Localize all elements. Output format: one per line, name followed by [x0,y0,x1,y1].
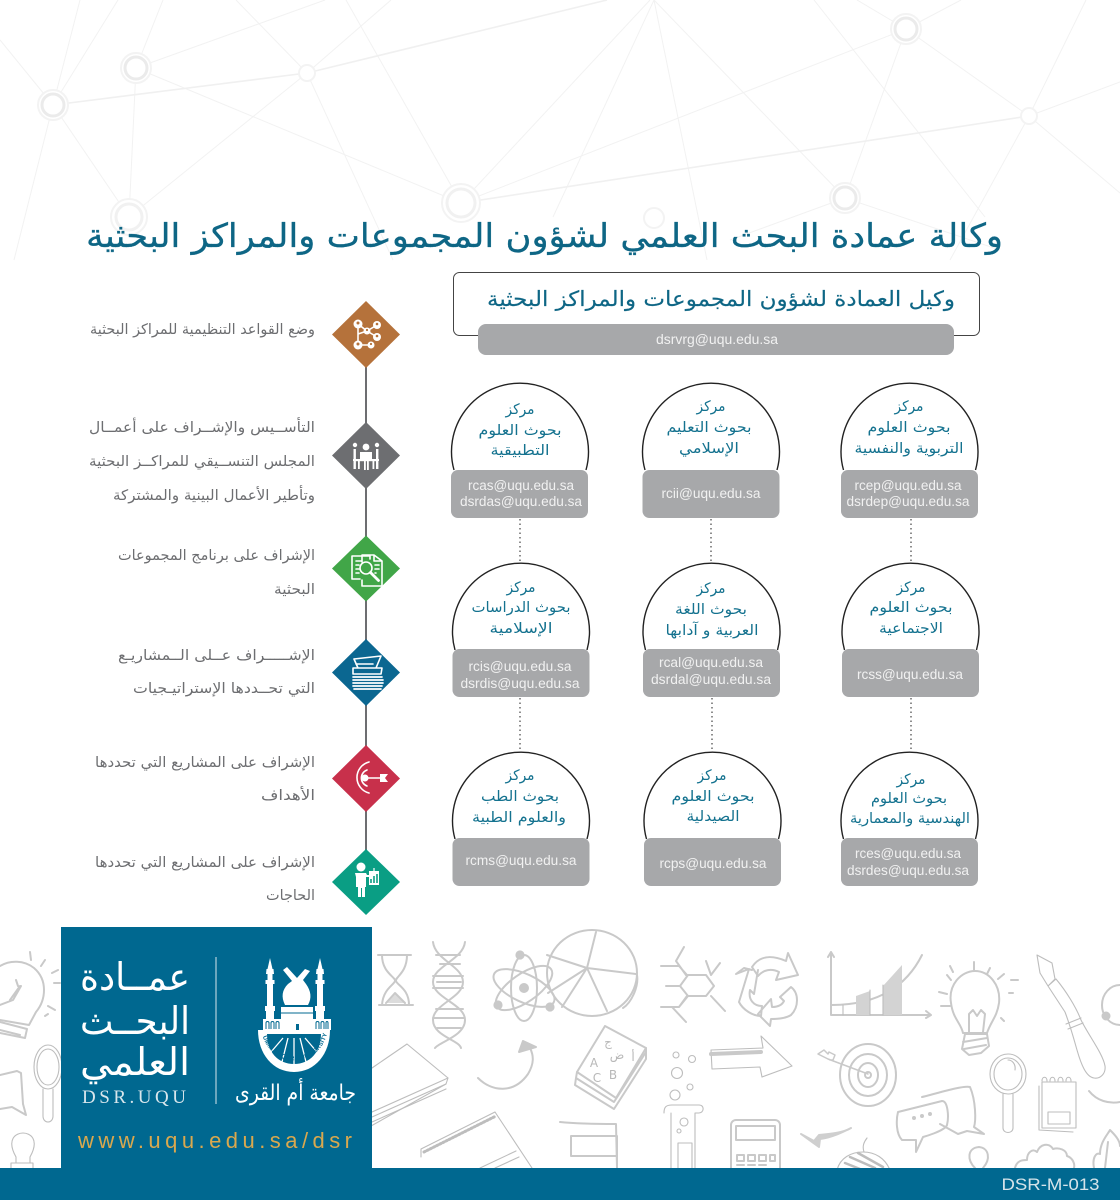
panel: centre applied sciences: التطبيقية [490,443,550,459]
icon: cloud [1015,1145,1074,1168]
icon: chat bubbles [897,1087,984,1152]
sketch icons strip [0,930,1120,1180]
text block: task 3 [118,548,315,598]
panel: centre islamic studies: مركز [506,580,536,596]
icon: left magnifier [34,1045,62,1122]
text block: task 1: وضع القواعد التنظيمية للمراكز البحثية [90,322,315,338]
panel: centre arabic language [643,563,780,697]
text block: task 2: وتأطير الأعمال البينية والمشتركة [113,485,315,504]
panel: centre arabic language: العربية و آدابها [666,621,758,639]
icon: alphabet book: ج [604,1035,612,1049]
panel: centre medical sciences: بحوث الطب [481,789,559,805]
icon: right curve [1089,1091,1120,1103]
background: network pattern [0,0,1120,260]
panel: centre pharmacy: بحوث العلوم [672,789,754,805]
text block: task 6: الإشراف على المشاريع التي تحددها [95,855,315,871]
panel: centre engineering: بحوث العلوم [871,791,947,807]
icon: left arrow [801,1128,851,1147]
icon: blue diamond layered papers [332,639,400,706]
icon: teal diamond presenter [332,849,400,915]
panel: centre educational psychology: مركز [894,399,924,415]
panel: centre islamic studies: dsrdis@uqu.edu.sa [460,676,580,691]
panel: centre applied sciences: بحوث العلوم [478,423,562,439]
panel: centre medical sciences: مركز [505,768,534,784]
icon: alphabet book: ض [610,1048,624,1063]
panel: centre islamic studies: الإسلامية [490,621,552,637]
panel: centre applied sciences [451,383,588,518]
heading: deanship name: عمــادة [80,955,190,999]
icon: notepad [1039,1077,1076,1132]
text block: task 6: الحاجات [266,888,315,904]
panel: centre educational psychology [841,383,978,518]
panel: centre educational psychology: dsrdep@uqu.edu.sa [846,494,970,509]
panel: centre medical sciences: rcms@uqu.edu.sa [466,853,577,868]
text: website url: www.uqu.edu.sa/dsr [77,1128,352,1153]
icon: stacked notebook [371,1044,448,1126]
text block: task 4 [118,648,315,697]
timeline spine [365,340,367,880]
text block: task 2: المجلس التنســيقي للمراكــز البحثية [89,454,315,470]
panel: centre islamic education: rcii@uqu.edu.sa [662,486,761,501]
text block: task 2 [89,417,315,504]
panel: vice dean box [454,272,980,355]
text block: task 5 [95,755,315,804]
heading: deanship name: البحــث [80,999,190,1043]
panel: centre applied sciences: rcas@uqu.edu.sa [468,478,574,493]
panel: centre social sciences: الاجتماعية [879,621,943,637]
text: DSR.UQU: DSR.UQU [82,1087,186,1108]
panel: centre engineering: الهندسية والمعمارية [850,811,970,827]
icon: pie chart [547,930,637,1016]
panel: vice dean box: dsrvrg@uqu.edu.sa [656,332,778,347]
panel: centre engineering: dsrdes@uqu.edu.sa [847,863,969,878]
heading: deanship name: العلمي [80,1040,190,1084]
text block: task 5: الأهداف [261,786,315,804]
icon: atom [488,951,560,1021]
icon: recycle arrows [736,953,798,1026]
icon: right edge atom [1102,985,1120,1025]
icon: fountain pen [1037,955,1105,1078]
icon: DNA helix [433,942,465,1048]
icon: green diamond document search [332,536,400,602]
panel: centre pharmacy: rcps@uqu.edu.sa [660,856,767,871]
icon: small bulb outline [969,1147,988,1168]
icon: left stamp [11,1133,34,1168]
text: university name: جامعة أم القرى [235,1078,356,1106]
panel: centre educational psychology: التربوية والنفسية [854,441,964,457]
icon: curved arrow [478,1041,536,1089]
heading: deanship name [80,955,190,1084]
icon: apple [837,1138,890,1170]
title: وكالة عمادة البحث العلمي لشؤون المجموعات والمراكز البحثية [86,216,1003,255]
panel: centre arabic language: rcal@uqu.edu.sa [659,655,763,670]
icon: university emblem [258,958,331,1072]
icon: alphabet book: أ [631,1049,635,1064]
panel: centre pharmacy: مركز [697,768,726,784]
icon: flask with bubbles [664,1052,703,1168]
panel: centre islamic studies: rcis@uqu.edu.sa [468,659,572,674]
icon: calculator [731,1120,780,1180]
panel: centre social sciences [842,563,979,697]
panel: centre educational psychology: بحوث العلوم [868,420,950,436]
icon: alphabet book: A [590,1056,599,1070]
panel: centre engineering: rces@uqu.edu.sa [855,846,961,861]
panel: centre pharmacy [644,752,781,886]
icon: left speech bubble [0,1071,26,1115]
panel: vice dean box: وكيل العمادة لشؤون المجموعات والمراكز البحثية [487,287,955,311]
panel: centre applied sciences: dsrdas@uqu.edu.sa [460,494,582,509]
icon: university emblem: UMM AL-QURA UNIVERSITY [263,1032,327,1060]
panel: centre social sciences: بحوث العلوم [870,600,952,616]
icon: red diamond target [332,745,400,812]
icon: alphabet book: B [609,1068,617,1082]
panel: centre islamic studies [452,563,590,697]
panel: centre arabic language: مركز [696,581,726,597]
panel: centre islamic education [642,383,780,518]
footer bar: DSR-M-013 [1002,1175,1100,1194]
icon: left lightbulb [0,952,60,1038]
text block: task 2: التأســيس والإشــراف على أعمــال [89,417,315,436]
panel: centre social sciences: مركز [896,580,926,596]
dotted connectors between centres [520,519,911,752]
text block: task 4: التي تحــددها الإستراتيـجيات [133,681,315,697]
panel: centre islamic education: مركز [696,399,726,415]
footer bar [0,1168,1120,1200]
panel: centre social sciences: rcss@uqu.edu.sa [857,667,963,682]
text block: task 4: الإشـــــراف عــلى الــمشاريـع [118,648,315,664]
icon: right magnifier [990,1054,1026,1132]
panel: centre arabic language: بحوث اللغة [675,602,747,618]
icon: brown diamond network [332,301,400,368]
panel: centre educational psychology: rcep@uqu.edu.sa [854,478,962,493]
panel: centre engineering [841,752,978,886]
panel: centre islamic education: الإسلامي [679,441,739,457]
panel: centre arabic language: dsrdal@uqu.edu.sa [651,672,772,687]
panel: centre medical sciences: والعلوم الطبية [472,810,566,826]
icon: hourglass [378,955,413,1005]
icon: grey diamond meeting [332,422,400,489]
panel: centre engineering: مركز [896,772,926,788]
icon: hexagon molecule [661,947,725,1022]
icon: block arrow [711,1036,792,1077]
panel: centre medical sciences [452,752,590,886]
icon: right lightbulb [939,962,1018,1055]
panel: dean logo block [61,927,372,1168]
panel: centre applied sciences: مركز [505,402,534,418]
icon: area chart [828,952,931,1018]
panel: centre islamic studies: بحوث الدراسات [472,600,570,616]
icon: target with arrow [818,1044,896,1106]
text block: task 3: الإشراف على برنامج المجموعات [118,548,315,564]
panel: centre pharmacy: الصيدلية [686,809,740,825]
icon: clipboard sketch [560,1122,617,1168]
icon: alphabet book: C [593,1071,601,1085]
icon: leaf [1093,1130,1120,1168]
text block: task 3: البحثية [274,582,315,598]
icon: alphabet book [575,1026,646,1109]
panel: centre islamic education: بحوث التعليم [666,420,752,436]
icon: spiral notebook [421,1112,532,1168]
text block: task 5: الإشراف على المشاريع التي تحددها [95,755,315,771]
text block: task 6 [95,855,315,904]
